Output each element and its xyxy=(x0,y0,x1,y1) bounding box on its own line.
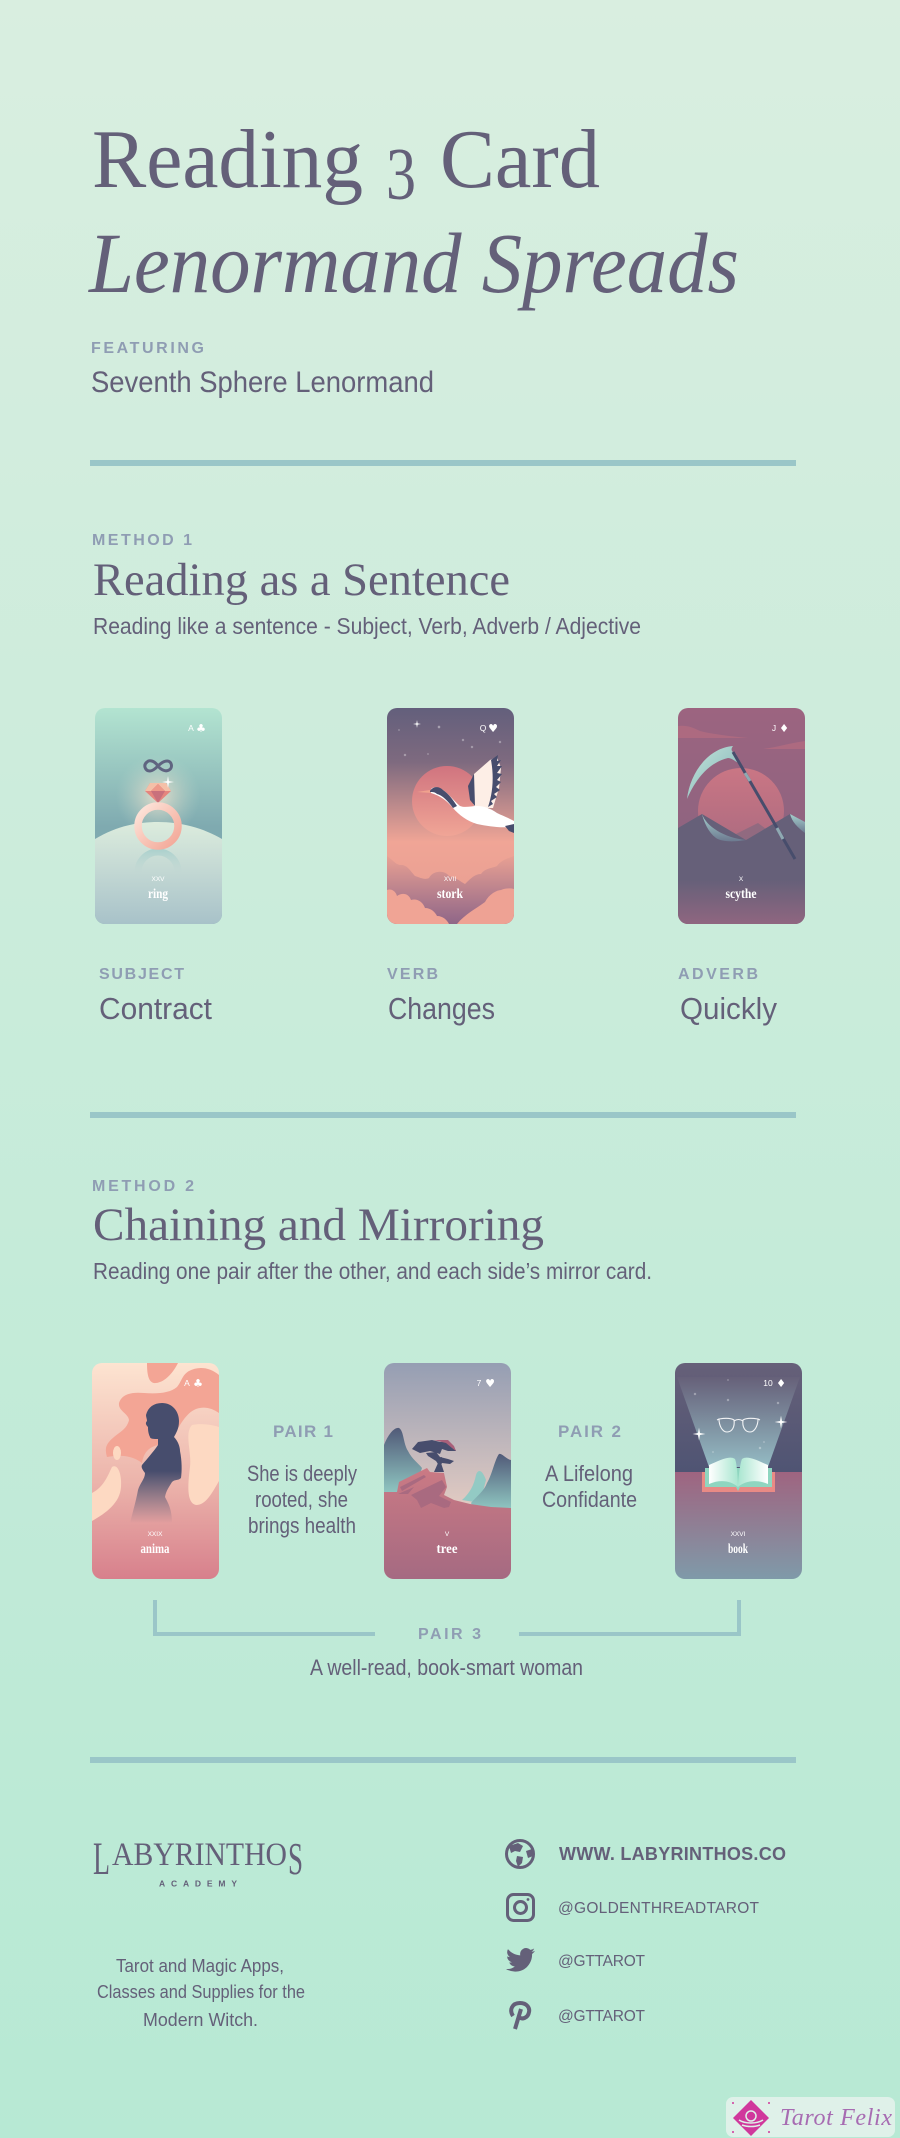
method 2 heading: METHOD 2 xyxy=(92,1178,194,1195)
label: adverb: ADVERB xyxy=(678,966,758,983)
logo: labyrinthos academy: ACADEMY xyxy=(159,1878,237,1888)
icon: stork xyxy=(417,755,514,833)
instagram handle: @GOLDENTHREADTAROT xyxy=(558,1900,760,1917)
title xyxy=(87,113,739,311)
featuring deck name: Seventh Sphere Lenormand xyxy=(91,366,434,399)
pair 1 text: rooted, she xyxy=(255,1487,348,1512)
card: book: 10 xyxy=(763,1378,773,1388)
icon: twitter xyxy=(506,1948,535,1972)
mountains xyxy=(384,1428,511,1509)
card: anima xyxy=(92,1363,219,1579)
icon: globe xyxy=(506,1840,534,1868)
title: Card xyxy=(440,113,600,206)
icon: book xyxy=(702,1458,775,1492)
bracket: pair 3 xyxy=(155,1600,739,1643)
method 1 heading: METHOD 1 xyxy=(92,532,192,549)
card: tree: 7 xyxy=(477,1378,482,1388)
watermark: tarot felix: Tarot Felix xyxy=(780,2105,892,2131)
card: scythe xyxy=(678,708,805,924)
card: ring: A xyxy=(188,723,194,733)
method 1 heading: Reading as a Sentence xyxy=(93,554,510,606)
label: verb xyxy=(387,966,495,1026)
bracket: pair 3: PAIR 3 xyxy=(418,1626,481,1643)
ring reflection xyxy=(136,849,179,863)
twitter handle: @GTTAROT xyxy=(558,1953,646,1970)
pair 1 text: PAIR 1 xyxy=(273,1422,333,1441)
card: stork: Q xyxy=(480,723,487,733)
pair 2 text: PAIR 2 xyxy=(558,1422,621,1441)
label: subject: SUBJECT xyxy=(99,966,184,983)
card: scythe: X xyxy=(739,876,744,883)
card: ring: ♣ xyxy=(196,722,206,735)
method 1 heading: Reading like a sentence - Subject, Verb, Adverb / Adjective xyxy=(93,613,641,639)
featuring label: FEATURING xyxy=(91,340,204,357)
clouds xyxy=(387,856,514,924)
card: book xyxy=(675,1363,802,1579)
tagline xyxy=(97,1955,305,2030)
card: book: book xyxy=(728,1542,748,1557)
tagline: Tarot and Magic Apps, xyxy=(116,1955,284,1976)
icon: tree xyxy=(412,1440,456,1472)
pinterest handle: @GTTAROT xyxy=(558,2008,646,2025)
label: adverb: Quickly xyxy=(680,991,777,1026)
card: book: ♦ xyxy=(776,1377,786,1390)
label: subject xyxy=(99,966,212,1026)
website: WWW. LABYRINTHOS.CO xyxy=(559,1844,786,1864)
icon: pinterest xyxy=(511,2003,529,2029)
label: adverb xyxy=(678,966,777,1026)
label: subject: Contract xyxy=(99,991,212,1026)
watermark: tarot felix xyxy=(726,2097,895,2137)
pair 2 text: Confidante xyxy=(542,1487,637,1512)
pair 1 text xyxy=(247,1422,358,1538)
card: stork xyxy=(387,708,514,924)
ground and rock xyxy=(384,1468,511,1579)
title: 3 xyxy=(386,134,416,216)
pair 2 text xyxy=(542,1422,637,1512)
card: scythe: ♦ xyxy=(779,722,789,735)
icon: ring xyxy=(138,806,178,846)
card: anima: XXIX xyxy=(148,1531,163,1538)
icon: instagram xyxy=(508,1894,534,1920)
card: book: XXVI xyxy=(731,1531,746,1538)
logo: labyrinthos academy: L xyxy=(93,1833,110,1885)
card: scythe: J xyxy=(772,723,776,733)
tagline: Modern Witch. xyxy=(143,2009,258,2030)
logo: labyrinthos academy xyxy=(93,1833,303,1888)
icon: scythe xyxy=(687,746,795,859)
icon: glasses xyxy=(717,1418,760,1432)
card: stork: stork xyxy=(437,887,463,902)
card: tree: V xyxy=(445,1531,450,1538)
card: stork: ♥ xyxy=(488,722,498,735)
pair 1 text: She is deeply xyxy=(247,1461,358,1486)
label: verb: VERB xyxy=(387,966,438,983)
card: stork: XVII xyxy=(444,876,456,883)
card: anima: A xyxy=(184,1378,190,1388)
card: tree: tree xyxy=(436,1542,458,1557)
method 1 heading xyxy=(92,532,641,639)
logo: labyrinthos academy: S xyxy=(288,1834,303,1884)
card: ring xyxy=(95,708,222,924)
pair 1 text: brings health xyxy=(248,1513,356,1538)
icon: silhouette xyxy=(130,1403,182,1523)
label: verb: Changes xyxy=(388,991,495,1026)
card: anima: anima xyxy=(140,1542,170,1557)
card: tree: ♥ xyxy=(485,1377,495,1390)
method 2 heading xyxy=(92,1178,652,1284)
method 2 heading: Reading one pair after the other, and each side’s mirror card. xyxy=(93,1258,652,1284)
title: Lenormand Spreads xyxy=(87,215,739,311)
card: scythe: scythe xyxy=(726,887,756,902)
tagline: Classes and Supplies for the xyxy=(97,1981,305,2002)
method 2 heading: Chaining and Mirroring xyxy=(93,1199,544,1251)
icon: infinity xyxy=(145,761,171,771)
card: anima: ♣ xyxy=(193,1377,203,1390)
card: ring: ring xyxy=(148,887,168,902)
card: ring: XXV xyxy=(151,876,165,883)
logo: labyrinthos academy: ABYRINTHO xyxy=(112,1837,287,1873)
card: tree xyxy=(384,1363,511,1579)
pair 3 text: A well-read, book-smart woman xyxy=(310,1655,583,1680)
icon: gem xyxy=(145,783,171,803)
pair 2 text: A Lifelong xyxy=(545,1461,633,1486)
mountains xyxy=(678,814,805,924)
blobs xyxy=(92,1363,219,1521)
title: Reading xyxy=(92,113,363,206)
